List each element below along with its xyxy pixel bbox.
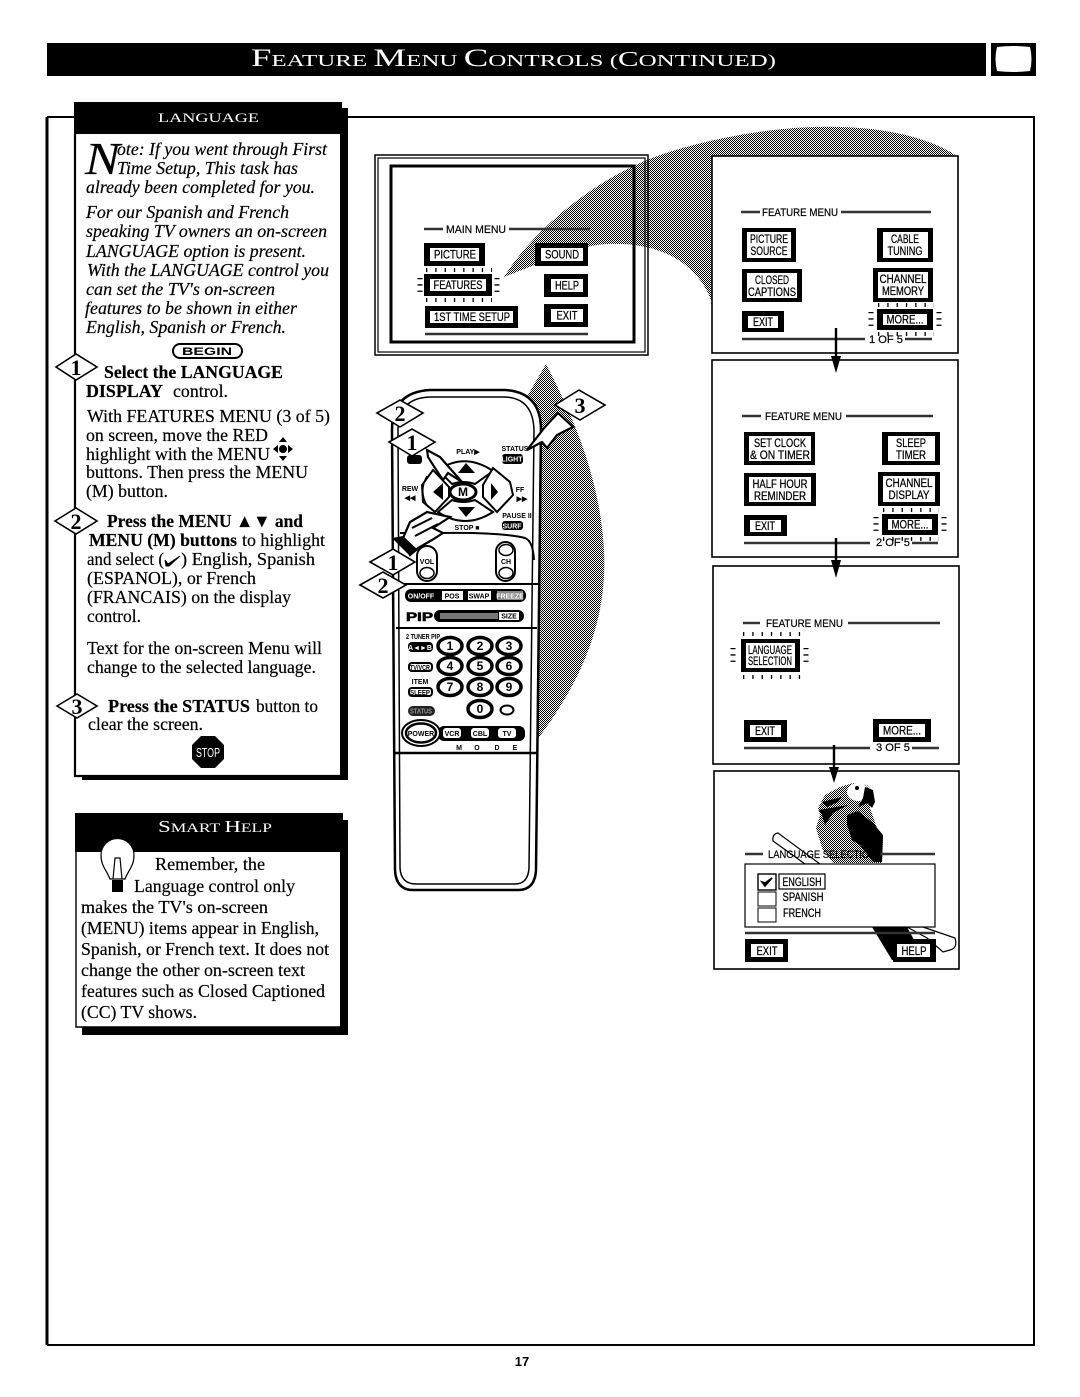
- language selection heading: LANGUAGE SELECTION: [768, 849, 876, 861]
- button: help: HELP: [555, 280, 579, 292]
- swoosh linking main menu to feature menu: [504, 127, 958, 300]
- number keypad: 9: [506, 680, 513, 694]
- button: help: HELP: [902, 946, 927, 958]
- page number: 17: [515, 1354, 529, 1369]
- number keypad: 5: [477, 659, 484, 673]
- step 1 text: control.: [173, 381, 228, 401]
- button: help: [544, 274, 588, 297]
- arrow: 2 of 5 to 3 of 5: [831, 538, 841, 578]
- smart help text: makes the TV's on-screen: [81, 897, 268, 917]
- step 1 text: (M) button.: [86, 481, 168, 502]
- option: spanish: [758, 892, 824, 906]
- option: french: [758, 908, 821, 922]
- option: spanish: SPANISH: [782, 892, 824, 904]
- button: features highlighted: FEATURES: [434, 280, 483, 292]
- step 2 text: MENU (M) buttons: [89, 530, 237, 551]
- pip button row: POS: [445, 594, 460, 600]
- button: closed captions: [742, 269, 802, 302]
- note text: For our Spanish and French: [85, 202, 289, 222]
- button: channel memory: MEMORY: [882, 286, 924, 298]
- left function buttons: A◄►B: [408, 645, 432, 652]
- begin badge: [173, 344, 242, 358]
- button: language selection highlighted: [733, 634, 806, 677]
- step 2 text: change to the selected language.: [87, 657, 316, 677]
- step 3 text: [88, 696, 318, 734]
- button: channel memory: CHANNEL: [880, 274, 927, 286]
- button: cable tuning: TUNING: [888, 246, 923, 258]
- step 2 text: ) English, Spanish: [181, 549, 315, 570]
- number keypad: 2: [477, 639, 484, 653]
- note text: can set the TV's on-screen: [86, 279, 275, 299]
- step 1 text: DISPLAY: [86, 381, 163, 401]
- step 1 text: With FEATURES MENU (3 of 5): [87, 406, 330, 427]
- power and mode row: CBL: [473, 731, 488, 738]
- button: set clock: [744, 432, 815, 465]
- parrot illustration: [773, 783, 956, 960]
- button: half hour reminder: HALF HOUR: [752, 479, 808, 491]
- channel rocker: [496, 542, 515, 581]
- number keypad: 0: [477, 702, 484, 716]
- button: help: [893, 939, 936, 962]
- pip button row: [405, 589, 526, 602]
- button: sleep timer: [882, 432, 940, 465]
- smart help text: features such as Closed Captioned: [81, 981, 325, 1001]
- button: more highlighted: [871, 305, 939, 334]
- arrow: 1 of 5 to 2 of 5: [831, 328, 841, 373]
- arrow: 3 of 5 to language selection: [829, 745, 839, 783]
- button: exit: [744, 720, 787, 742]
- remote labels: SURF: [502, 524, 522, 530]
- button: half hour reminder: [744, 473, 816, 506]
- button: first time setup: 1ST TIME SETUP: [434, 312, 510, 324]
- power and mode row: POWER: [408, 731, 434, 738]
- power and mode row: TV: [503, 731, 512, 738]
- icon: menu arrows: [273, 437, 293, 461]
- panel: feature menu 1 of 5: [712, 156, 958, 353]
- power and mode row: VCR: [445, 731, 459, 738]
- step 1 text: Select the LANGUAGE: [104, 362, 283, 382]
- button: sleep timer: SLEEP: [896, 438, 926, 450]
- button: sound: [535, 243, 588, 266]
- feature menu heading: FEATURE MENU: [766, 618, 843, 630]
- step 3 text: Press the STATUS: [108, 696, 250, 716]
- option: french: FRENCH: [783, 908, 821, 920]
- button: set clock: & ON TIMER: [750, 450, 810, 462]
- button: exit: EXIT: [556, 310, 578, 322]
- smart help text: Language control only: [134, 876, 295, 896]
- option: english: ENGLISH: [782, 877, 822, 889]
- pip label and bar: [406, 610, 524, 624]
- remote labels: STOP ■: [455, 525, 479, 532]
- button: picture source: PICTURE: [750, 234, 788, 246]
- step marker 1 on remote: [389, 429, 435, 456]
- button: exit: [742, 311, 784, 332]
- left function buttons: SLEEP: [410, 690, 430, 697]
- number keypad: [438, 638, 521, 718]
- button: more: MORE...: [883, 726, 921, 738]
- button: exit: [744, 515, 787, 536]
- smart help text: change the other on-screen text: [81, 960, 305, 980]
- begin badge: BEGIN: [182, 346, 232, 358]
- step 2 text: (FRANCAIS) on the display: [87, 587, 291, 608]
- remote labels: REW: [402, 486, 419, 493]
- button: language selection highlighted: SELECTION: [748, 656, 792, 668]
- panel: language selection screen: [714, 771, 959, 969]
- step 3 text: clear the screen.: [88, 714, 203, 734]
- button: cable tuning: [877, 228, 933, 262]
- step marker 2 lower on remote: [360, 572, 406, 598]
- button: picture: [424, 243, 485, 266]
- power and mode row: E: [513, 745, 518, 752]
- left function buttons: ITEM: [412, 679, 429, 686]
- pip label and bar: PIP: [406, 610, 433, 624]
- volume rocker: [417, 546, 437, 581]
- button: cable tuning: CABLE: [891, 234, 919, 246]
- power and mode row: D: [494, 745, 500, 752]
- button: channel display: DISPLAY: [888, 490, 930, 502]
- volume rocker: VOL: [420, 559, 435, 566]
- left function buttons: [406, 634, 440, 716]
- hand pointing to up button: [427, 450, 462, 482]
- heading: smart help: S MART H ELP: [158, 817, 272, 836]
- remote labels: STATUS: [502, 446, 529, 453]
- d-pad: M: [458, 485, 468, 499]
- step marker 3 on remote: [555, 390, 605, 420]
- options box: [745, 864, 935, 927]
- step 2 text: Press the MENU ▲▼ and: [107, 511, 303, 531]
- step 1 text: buttons. Then press the MENU: [86, 462, 308, 482]
- step marker 2 on remote: [377, 400, 423, 427]
- option: english: [758, 874, 825, 890]
- button: closed captions: CLOSED: [755, 275, 789, 287]
- button: sound: SOUND: [545, 250, 579, 262]
- step 2 text: Text for the on-screen Menu will: [87, 638, 322, 658]
- button: channel display: CHANNEL: [886, 478, 933, 490]
- hand pointing to status button: [527, 413, 573, 450]
- remote labels: [402, 446, 532, 532]
- number keypad: 3: [506, 639, 513, 653]
- step marker 1 lower on remote: 1: [388, 550, 398, 575]
- number keypad: 1: [447, 639, 454, 653]
- title banner: F EATURE M ENU C ONTROLS ( C ONTINUED): [251, 45, 776, 72]
- button: language selection highlighted: LANGUAGE: [748, 645, 792, 657]
- left function buttons: TV/VCR: [410, 665, 430, 672]
- button: set clock: SET CLOCK: [754, 438, 806, 450]
- step 1 marker: 1: [70, 355, 82, 380]
- panel: feature menu 3 of 5: [713, 566, 959, 764]
- power and mode row: [402, 720, 525, 752]
- icon: stop sign: STOP: [196, 745, 220, 760]
- icon: light bulb: [101, 839, 134, 892]
- button: exit: [544, 304, 588, 327]
- button: channel memory: [873, 268, 933, 302]
- step 1 text: [86, 362, 330, 502]
- note text: ote: If you went through First: [117, 139, 328, 159]
- pip button row: ON/OFF: [408, 594, 435, 600]
- button: more highlighted: MORE...: [886, 314, 924, 326]
- hand pointing to down button: [392, 512, 450, 556]
- remote labels: FF: [516, 487, 525, 494]
- step marker 3 on remote: 3: [574, 393, 586, 418]
- note text: LANGUAGE option is present.: [85, 241, 306, 261]
- panel: language: [55, 102, 348, 780]
- button: exit: EXIT: [755, 521, 775, 533]
- icon: check mark: [165, 556, 180, 566]
- icon: tv screen: [991, 43, 1036, 76]
- step 1 marker: [56, 354, 97, 380]
- note text: English, Spanish or French.: [85, 317, 286, 337]
- number keypad: 4: [447, 659, 454, 673]
- panel: feature menu 2 of 5: [712, 360, 958, 557]
- page indicator: 1 OF 5: [869, 334, 903, 346]
- button: more highlighted: MORE...: [892, 520, 928, 532]
- step 3 text: button to: [256, 696, 318, 716]
- step 2 text: to highlight: [242, 530, 325, 550]
- note text: [84, 133, 329, 337]
- button: sleep timer: TIMER: [896, 450, 926, 462]
- step marker 2 lower on remote: 2: [378, 573, 388, 598]
- button: exit: EXIT: [756, 946, 778, 958]
- page indicator: 3 OF 5: [876, 742, 910, 754]
- step 1 text: highlight with the MENU: [86, 444, 270, 464]
- page indicator: 2 OF 5: [876, 537, 910, 549]
- power and mode row: O: [474, 745, 480, 752]
- note text: speaking TV owners an on-screen: [86, 221, 327, 241]
- step 3 marker: [57, 694, 97, 719]
- pip button row: SWAP: [469, 594, 490, 600]
- button: exit: EXIT: [755, 726, 775, 738]
- number keypad: 6: [506, 659, 513, 673]
- remote labels: ▶▶: [516, 496, 528, 503]
- note text: already been completed for you.: [86, 177, 315, 197]
- d-pad: [422, 461, 513, 521]
- smart help text: Remember, the: [155, 854, 265, 874]
- swoosh behind remote: [525, 364, 604, 740]
- main menu heading: MAIN MENU: [446, 224, 506, 236]
- number keypad: 8: [477, 680, 484, 694]
- number keypad: 7: [447, 680, 454, 694]
- channel rocker: CH: [501, 559, 511, 566]
- step 2 text: and select (: [87, 549, 164, 570]
- smart help text: (MENU) items appear in English,: [81, 918, 319, 939]
- remote labels: LIGHT: [502, 456, 523, 464]
- button: closed captions: CAPTIONS: [748, 287, 796, 299]
- panel: main menu screen: [375, 155, 648, 355]
- pip label and bar: SIZE: [501, 614, 517, 620]
- button: more: [873, 719, 931, 742]
- button: picture: PICTURE: [434, 250, 476, 262]
- left function buttons: STATUS: [410, 708, 432, 716]
- button: first time setup: [425, 306, 518, 328]
- step 2 marker: [55, 508, 97, 534]
- smart help text: (CC) TV shows.: [81, 1002, 197, 1023]
- remote labels: PAUSE II: [502, 513, 532, 520]
- button: exit: [745, 939, 788, 962]
- step 2 marker: 2: [70, 509, 82, 534]
- power and mode row: M: [456, 745, 462, 752]
- icon: stop sign: [192, 736, 224, 768]
- button: channel display: [878, 472, 940, 506]
- step 2 text: (ESPANOL), or French: [87, 568, 256, 589]
- note text: features to be shown in either: [85, 298, 298, 318]
- step marker 1 lower on remote: [370, 549, 415, 575]
- step 3 marker: 3: [72, 694, 82, 719]
- button: picture source: SOURCE: [750, 246, 788, 258]
- step 1 text: on screen, move the RED: [86, 425, 268, 445]
- button: more highlighted: [876, 510, 944, 539]
- feature menu heading: FEATURE MENU: [765, 411, 842, 423]
- step 2 text: [87, 511, 325, 677]
- white backing of main menu screen: [374, 154, 649, 355]
- step marker 1 on remote: 1: [406, 430, 418, 455]
- button: picture source: [742, 228, 796, 262]
- title banner: [47, 43, 986, 76]
- note text: With the LANGUAGE control you: [87, 260, 329, 280]
- button: half hour reminder: REMINDER: [754, 491, 806, 503]
- step 2 text: control.: [87, 606, 141, 626]
- heading: language: LANGUAGE: [158, 110, 259, 125]
- remote control: [392, 390, 541, 890]
- note text: Time Setup, This task has: [117, 158, 298, 178]
- smart help text: [81, 854, 329, 1023]
- note text: N: [84, 133, 123, 184]
- panel: smart help: [75, 813, 348, 1035]
- remote labels: ◀◀: [404, 495, 416, 502]
- left function buttons: 2 TUNER PIP: [406, 634, 440, 641]
- feature menu heading: FEATURE MENU: [762, 207, 838, 219]
- button: features highlighted: [420, 270, 497, 300]
- step marker 2 on remote: 2: [394, 401, 406, 426]
- pip button row: FREEZE: [496, 594, 524, 600]
- smart help text: Spanish, or French text. It does not: [81, 939, 329, 959]
- button: exit: EXIT: [753, 317, 773, 329]
- remote labels: PLAY▶: [456, 449, 480, 456]
